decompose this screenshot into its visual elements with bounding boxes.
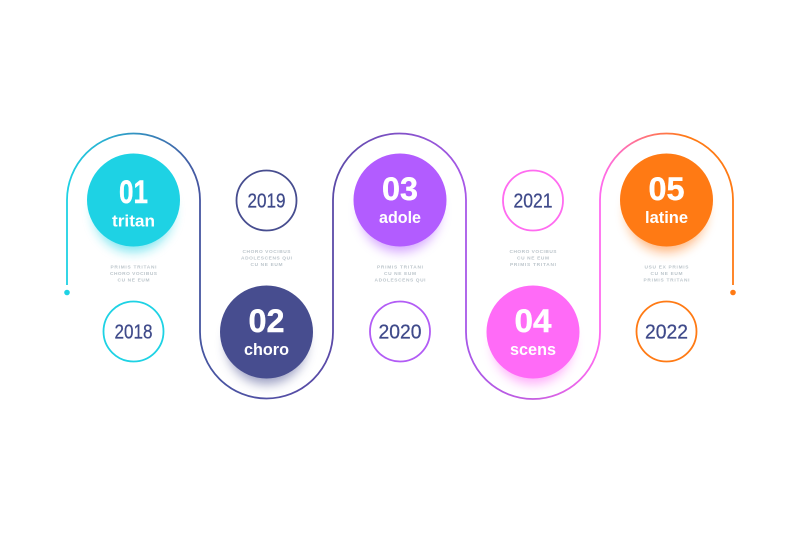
step 01 description — [110, 264, 158, 284]
step 03 description: ADOLESCENS QUI — [374, 278, 426, 284]
step 02 description — [241, 249, 293, 268]
step 05 badge: 05 — [648, 171, 684, 207]
year 2020: 2020 — [378, 322, 422, 344]
path end dot — [730, 290, 736, 295]
step 01 badge: tritan — [112, 212, 155, 230]
step 05 description: CU NE EUM — [650, 271, 682, 277]
year 2022: 2022 — [645, 322, 688, 344]
step 04 description — [510, 249, 557, 268]
step 04 badge — [486, 286, 580, 384]
step 04 description: CHORO VOCIBUS — [510, 249, 557, 255]
step 01 description: CHORO VOCIBUS — [110, 271, 158, 277]
step 04 description: PRIMIS TRITANI — [510, 262, 557, 268]
step 02 badge: 02 — [248, 303, 284, 339]
step 04 badge: 04 — [514, 303, 552, 339]
step 05 badge: latine — [645, 208, 688, 227]
year 2020 — [370, 302, 430, 362]
step 03 badge: 03 — [382, 171, 418, 207]
step 03 description — [374, 264, 426, 284]
step 04 description: CU NE EUM — [517, 256, 549, 262]
step 05 description — [644, 264, 690, 284]
step 03 description: CU NE EUM — [384, 271, 416, 277]
step 02 description: CU NE EUM — [250, 262, 282, 268]
step 01 description: PRIMIS TRITANI — [110, 264, 157, 270]
year 2021 — [503, 170, 563, 230]
step 03 description: PRIMIS TRITANI — [377, 264, 424, 270]
step 03 badge: adole — [379, 208, 421, 227]
step 02 badge — [220, 286, 313, 384]
step 04 badge: scens — [510, 340, 556, 359]
year 2022 — [636, 302, 696, 362]
year 2019: 2019 — [248, 190, 286, 212]
step 05 badge — [620, 154, 713, 252]
year 2019 — [236, 170, 296, 230]
year 2018: 2018 — [114, 322, 152, 344]
step 02 badge: choro — [244, 340, 289, 359]
year 2021: 2021 — [514, 190, 552, 212]
year 2018 — [104, 302, 164, 362]
step 02 description: ADOLESCENS QUI — [241, 256, 293, 262]
step 05 description: USU EX PRIMIS — [644, 264, 689, 270]
path start dot — [64, 290, 70, 295]
step 02 description: CHORO VOCIBUS — [242, 249, 291, 255]
step 05 description: PRIMIS TRITANI — [644, 278, 690, 284]
winding timeline path — [67, 134, 733, 399]
step 01 description: CU NE EUM — [118, 278, 150, 284]
step 01 badge — [87, 154, 180, 252]
step 01 badge: 01 — [119, 174, 148, 210]
step 03 badge — [354, 154, 446, 252]
